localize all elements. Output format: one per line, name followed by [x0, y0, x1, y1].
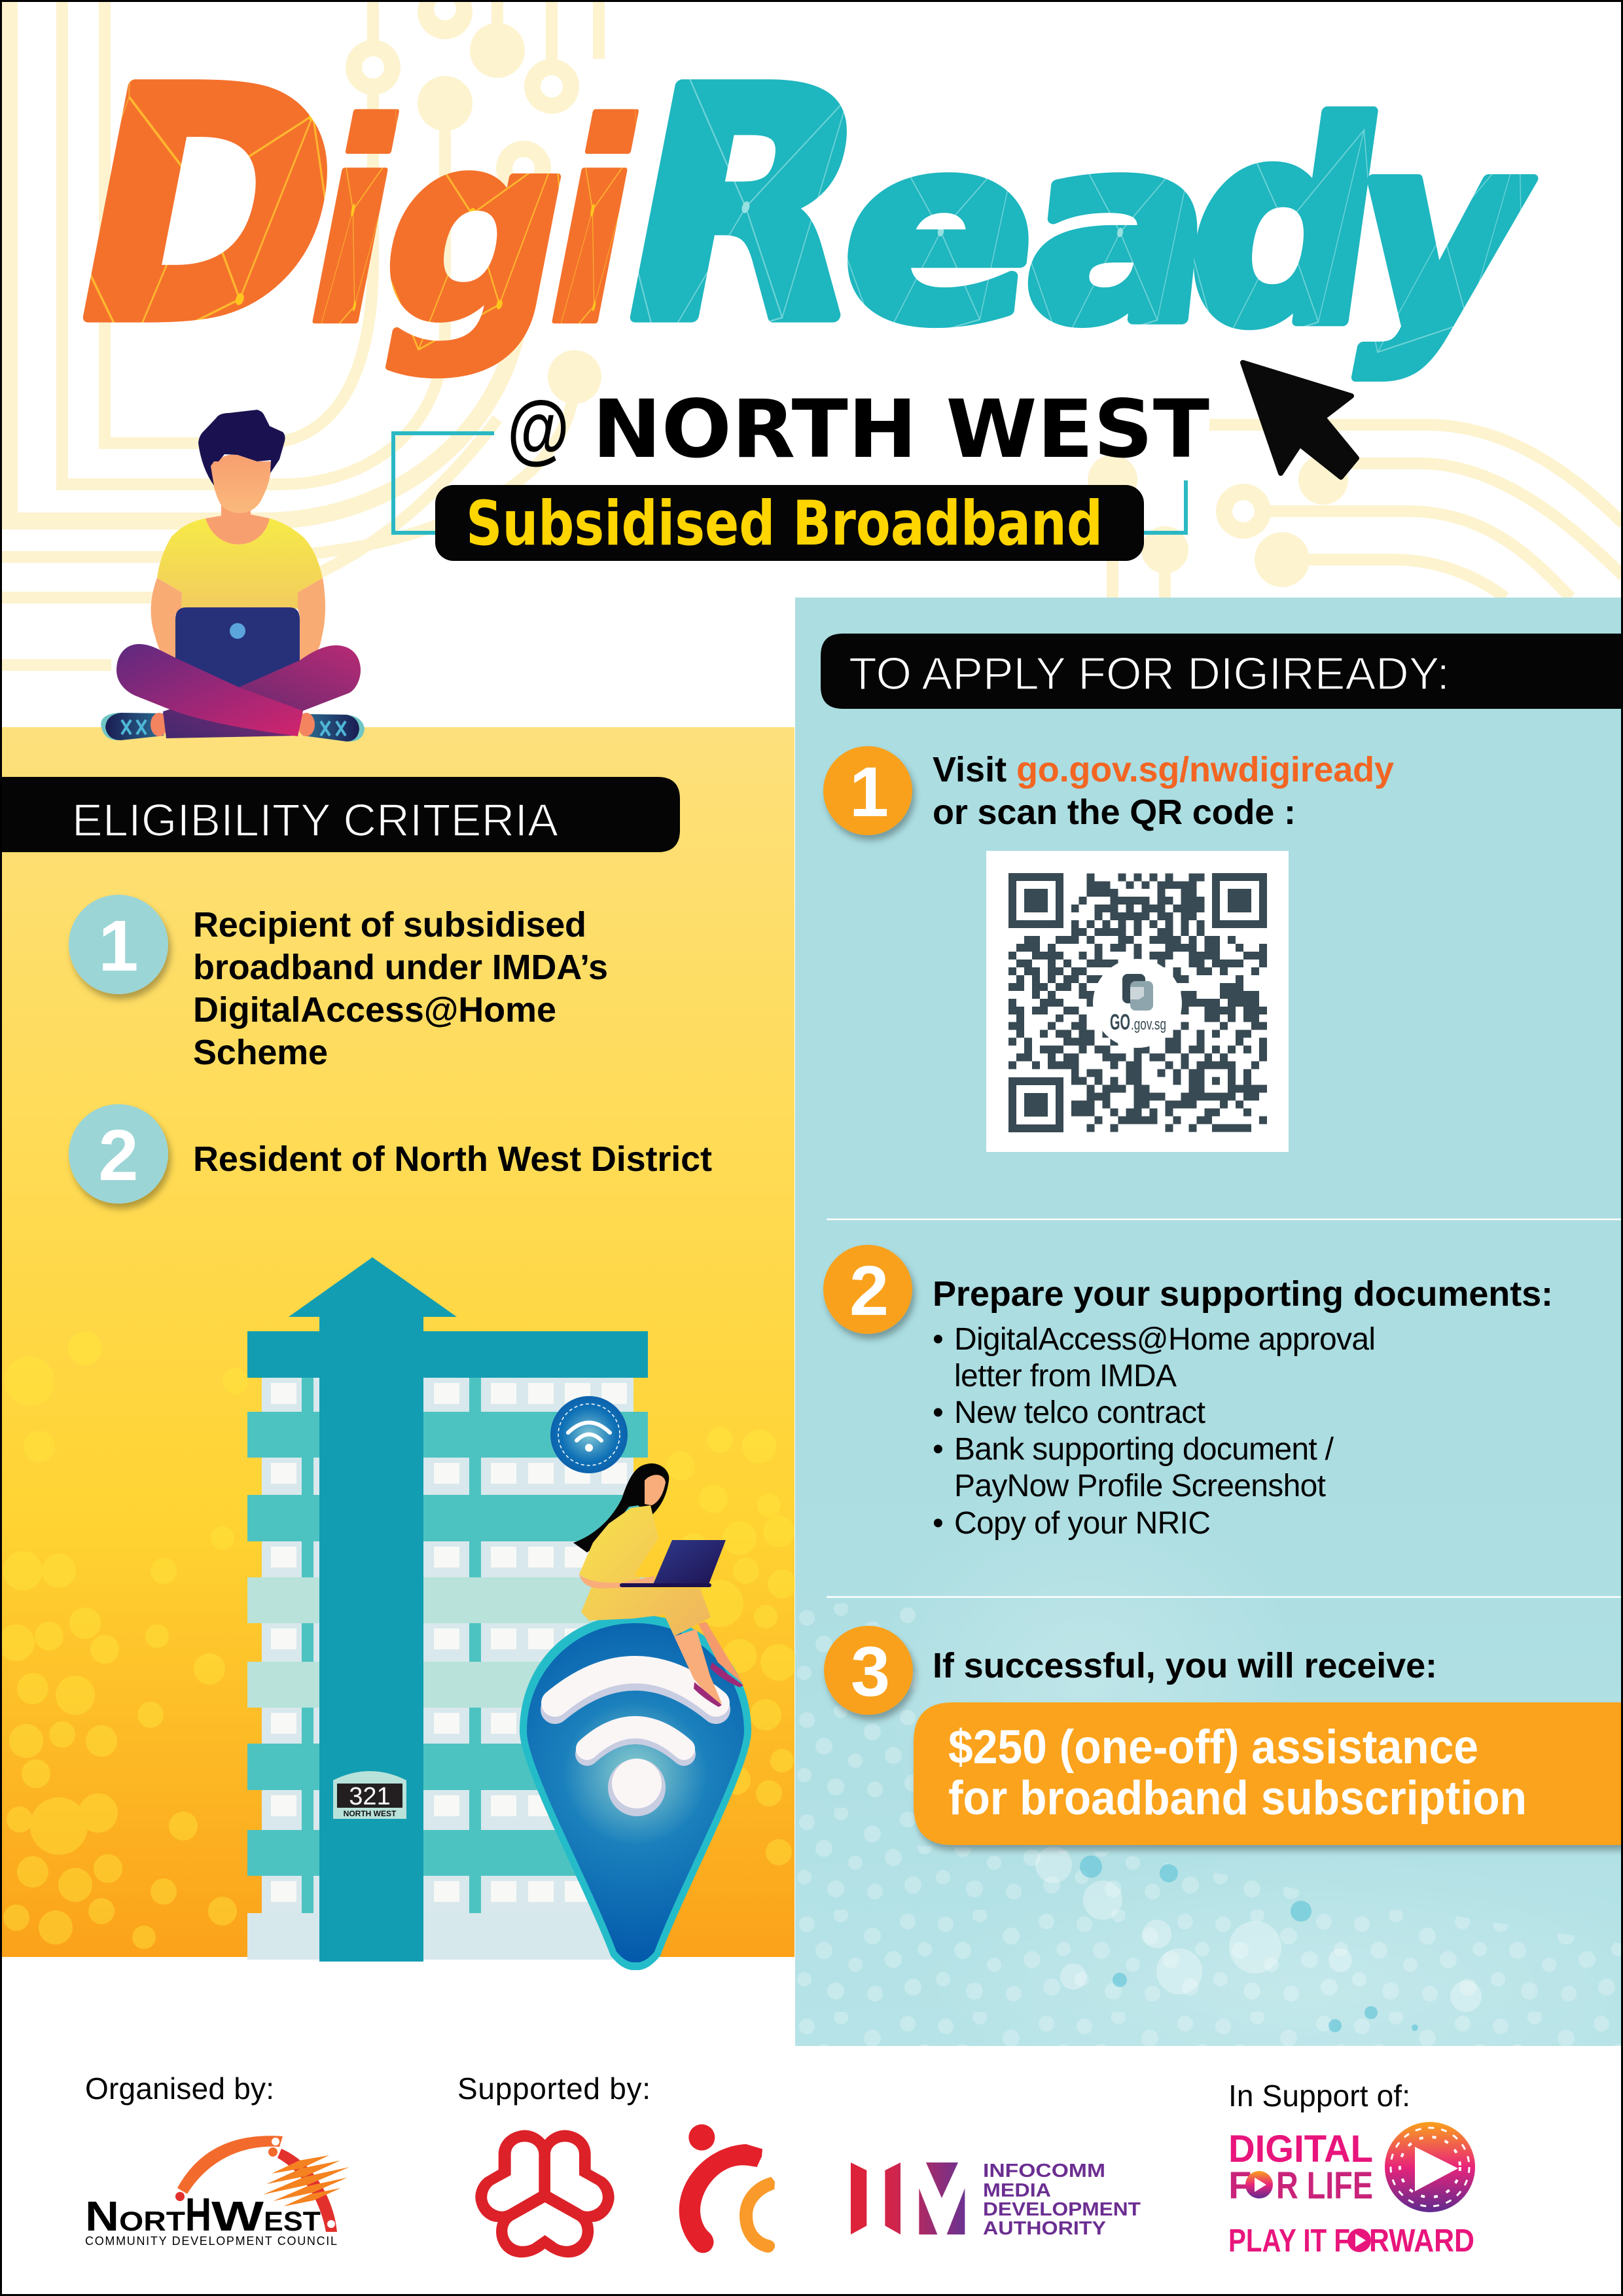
heading: eligibility criteria — [0, 777, 680, 852]
title: DigiReady: d — [1169, 66, 1401, 386]
logo: Digital for Life: DIGITAL — [1228, 2128, 1373, 2170]
logo: red trefoil — [475, 2130, 615, 2257]
logo: Digital for Life: RWARD — [1369, 2223, 1474, 2259]
wordmark: N — [85, 2193, 119, 2240]
step 3: If successful, you will receive: — [933, 1646, 1437, 1685]
icon: small wifi badge — [550, 1396, 628, 1473]
criterion 1: DigitalAccess@Home — [193, 990, 556, 1030]
title: DigiReady: i — [522, 66, 665, 386]
footer: in support of — [1228, 2079, 1475, 2259]
wordmark: EST — [264, 2206, 321, 2236]
illustration: man with laptop — [101, 410, 365, 742]
document list: Bank supporting document / — [954, 1432, 1334, 1467]
banner: subsidised broadband: Subsidised Broadband — [466, 488, 1103, 560]
logo: North West CDC — [85, 2136, 349, 2248]
panel: how to apply teal background — [795, 598, 1623, 2114]
title: DigiReady: D — [47, 24, 368, 391]
document list: New telco contract — [954, 1395, 1205, 1430]
step 2: Prepare your supporting documents: — [933, 1274, 1553, 1314]
criterion 2: 2 — [98, 1115, 139, 1196]
title: DigiReady: e — [829, 85, 1053, 378]
wordmark: ORT — [119, 2206, 185, 2236]
callout: $250 assistance: for broadband subscription — [948, 1772, 1527, 1825]
panel: eligibility yellow background — [0, 727, 797, 1957]
step 2: 2 — [849, 1251, 889, 1330]
document list: PayNow Profile Screenshot — [954, 1469, 1326, 1503]
footer: organised by: Organised by: — [85, 2072, 274, 2106]
step 2 — [823, 1245, 1553, 1541]
title: DigiReady — [47, 24, 1557, 391]
footer: supported by — [457, 2072, 1141, 2257]
subtitle: @ North West: @ — [507, 386, 569, 472]
callout: $250 assistance — [914, 1702, 1623, 1845]
footer: in support of: In Support of: — [1228, 2079, 1410, 2113]
document list: Copy of your NRIC — [954, 1506, 1211, 1541]
wordmark — [85, 2189, 321, 2241]
logo: Digital for Life: PLAY IT F — [1228, 2223, 1350, 2259]
block number sign: NORTH WEST — [344, 1809, 397, 1818]
logo: IMDA: AUTHORITY — [983, 2218, 1106, 2239]
illustration: woman with laptop on pin — [573, 1463, 743, 1707]
step 1: go.gov.sg/nwdigiready — [1016, 750, 1394, 789]
heading: to apply for digiready — [821, 634, 1623, 709]
step 3: 3 — [851, 1632, 890, 1711]
title: DigiReady: R — [594, 24, 897, 391]
document list — [933, 1322, 1376, 1541]
criterion 1 — [69, 895, 608, 1072]
logo: IMDA: DEVELOPMENT — [983, 2199, 1141, 2220]
subtitle: @ North West: NORTH WEST — [592, 383, 1209, 476]
criterion 1: Recipient of subsidised — [193, 905, 586, 944]
logo: IMDA — [851, 2161, 1141, 2239]
footer: organised by — [85, 2072, 349, 2248]
title: DigiReady: a — [1012, 86, 1228, 378]
logo: Digital for Life: F — [1228, 2164, 1251, 2207]
document list: • — [933, 1432, 944, 1467]
QR code — [986, 851, 1289, 1152]
shoes — [101, 713, 365, 742]
icon: wifi location pin — [520, 1615, 751, 1970]
block number sign — [333, 1771, 406, 1819]
criterion 1: Scheme — [193, 1033, 328, 1072]
GO.gov.sg logo: .gov.sg — [1131, 1016, 1166, 1033]
icon: mouse cursor — [1243, 363, 1357, 477]
divider lines — [827, 1219, 1623, 1597]
document list: letter from IMDA — [954, 1359, 1177, 1393]
title: DigiReady: y — [1330, 81, 1557, 382]
bokeh lights — [0, 1331, 797, 1949]
mosaic play circle — [1385, 2122, 1475, 2212]
illustration: HDB building — [247, 1257, 648, 1962]
step 1: or scan the QR code : — [933, 793, 1296, 832]
title: DigiReady: g — [359, 79, 597, 380]
wordmark: W — [211, 2193, 264, 2240]
wordmark: H — [185, 2189, 211, 2241]
document list: DigitalAccess@Home approval — [954, 1322, 1376, 1357]
logo: IMDA: INFOCOMM — [983, 2161, 1105, 2181]
criterion 1: broadband under IMDA’s — [193, 948, 608, 987]
document list: • — [933, 1322, 944, 1357]
logo: red and orange arcs — [679, 2125, 775, 2253]
logo: IMDA: MEDIA — [983, 2180, 1051, 2201]
heading: to apply for digiready: TO APPLY FOR DIGIREADY: — [849, 648, 1450, 699]
step 1: 1 — [849, 752, 889, 831]
footer: supported by: Supported by: — [457, 2072, 651, 2106]
step 3 — [824, 1626, 1437, 1715]
logo: North West CDC: COMMUNITY DEVELOPMENT COUNCIL — [85, 2234, 337, 2248]
title: DigiReady: i — [283, 66, 425, 386]
criterion 1: 1 — [98, 906, 139, 986]
GO.gov.sg logo — [1093, 959, 1182, 1048]
logo: Digital for Life — [1228, 2122, 1475, 2259]
step 1 — [823, 746, 1394, 835]
GO.gov.sg logo: GO — [1110, 1010, 1130, 1035]
step 1: Visit — [933, 750, 1007, 789]
block number sign: 321 — [349, 1783, 391, 1810]
bracket frame — [393, 433, 1186, 533]
document list: • — [933, 1506, 944, 1541]
criterion 2 — [69, 1104, 712, 1204]
logo: Digital for Life: R LIFE — [1276, 2164, 1373, 2207]
document list: • — [933, 1395, 944, 1430]
circuit board background pattern — [0, 0, 1623, 665]
callout: $250 assistance: $250 (one-off) assistance — [948, 1721, 1478, 1774]
heading: eligibility criteria: ELIGIBILITY CRITERIA — [72, 795, 558, 846]
criterion 2: Resident of North West District — [193, 1139, 712, 1179]
